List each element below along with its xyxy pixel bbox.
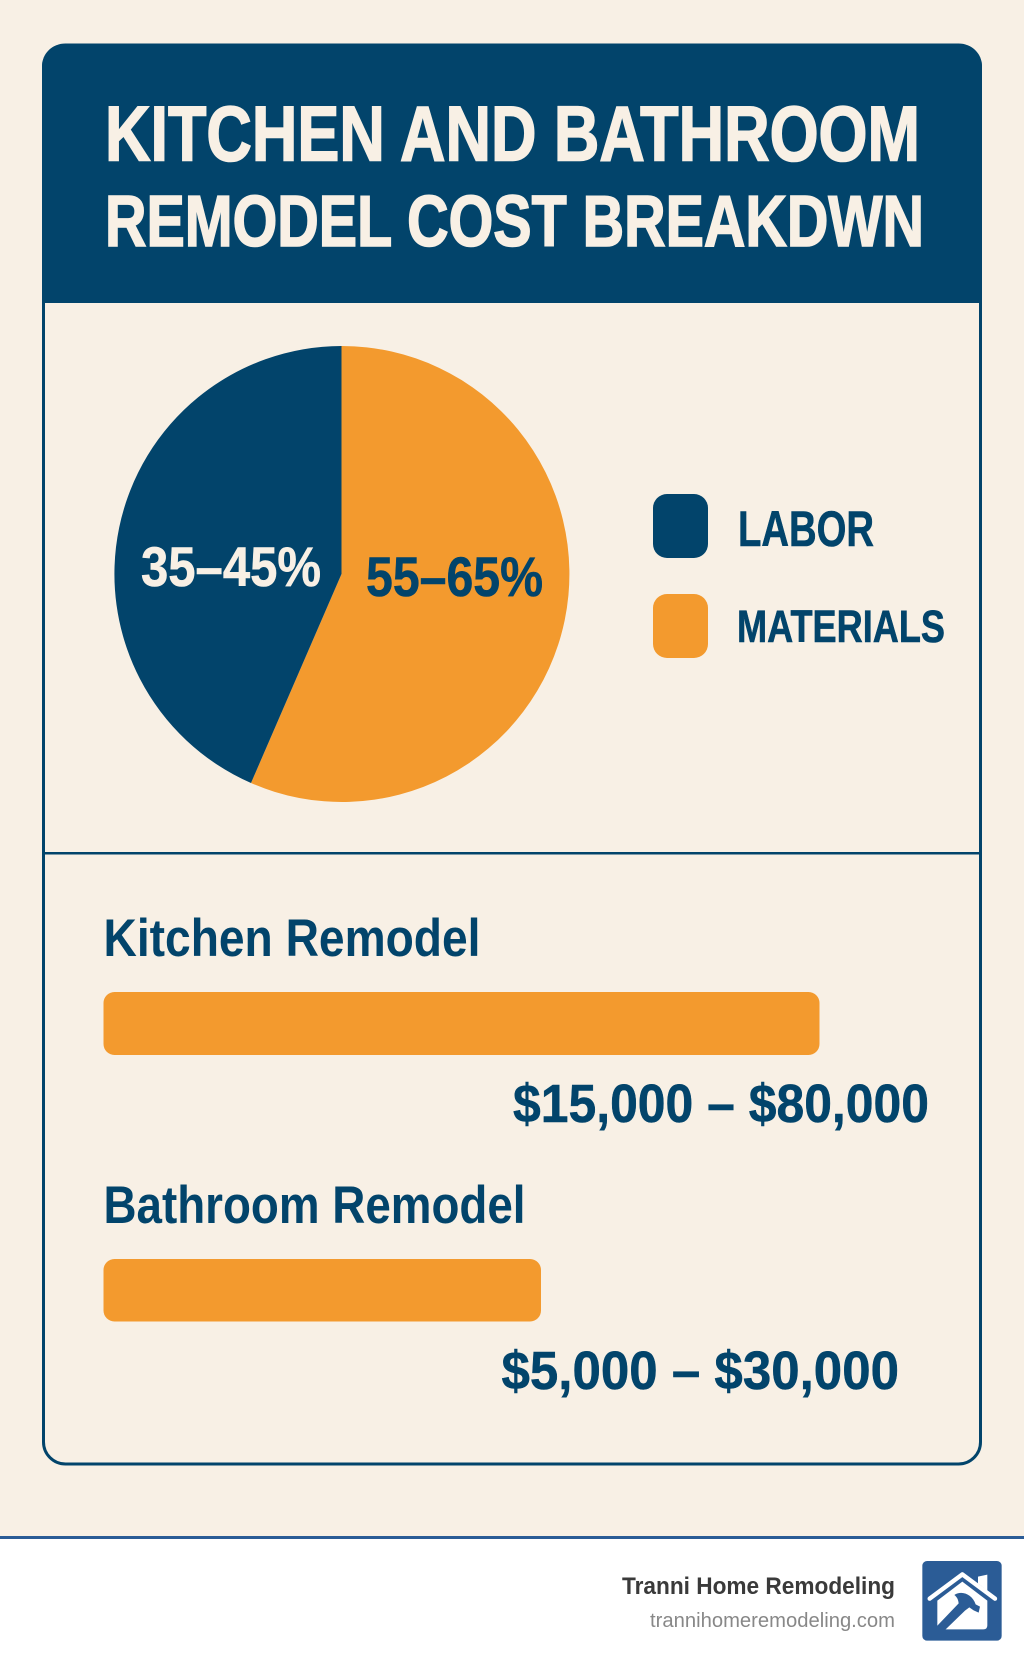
- header banner: [42, 44, 982, 303]
- icon: house and hammer logo: [922, 1561, 1002, 1641]
- footer: [0, 1536, 1024, 1666]
- title: [105, 92, 924, 262]
- kitchen cost range: $15,000 – $80,000: [513, 1074, 929, 1134]
- bathroom cost bar: [104, 1259, 541, 1322]
- legend item: materials: [653, 594, 945, 658]
- pie label: labor percent: 35–45%: [141, 535, 321, 598]
- pie label: materials percent: 55–65%: [366, 545, 543, 608]
- kitchen remodel section: [104, 909, 929, 1134]
- company name: Tranni Home Remodeling: [622, 1573, 895, 1600]
- kitchen cost bar: [104, 992, 820, 1055]
- legend item: materials: MATERIALS: [737, 601, 945, 652]
- legend item: labor: LABOR: [738, 501, 874, 557]
- pie chart: [114, 346, 569, 802]
- bathroom remodel section: [104, 1176, 899, 1401]
- legend: [653, 494, 945, 658]
- pie slice: materials: [251, 346, 569, 802]
- bathroom heading: Bathroom Remodel: [104, 1176, 526, 1235]
- company website: trannihomeremodeling.com: [650, 1610, 895, 1632]
- bathroom cost range: $5,000 – $30,000: [502, 1341, 899, 1401]
- kitchen heading: Kitchen Remodel: [104, 909, 480, 968]
- panel: main card: [42, 44, 982, 1464]
- pie slice: labor: [114, 346, 341, 783]
- legend item: labor: [653, 494, 874, 558]
